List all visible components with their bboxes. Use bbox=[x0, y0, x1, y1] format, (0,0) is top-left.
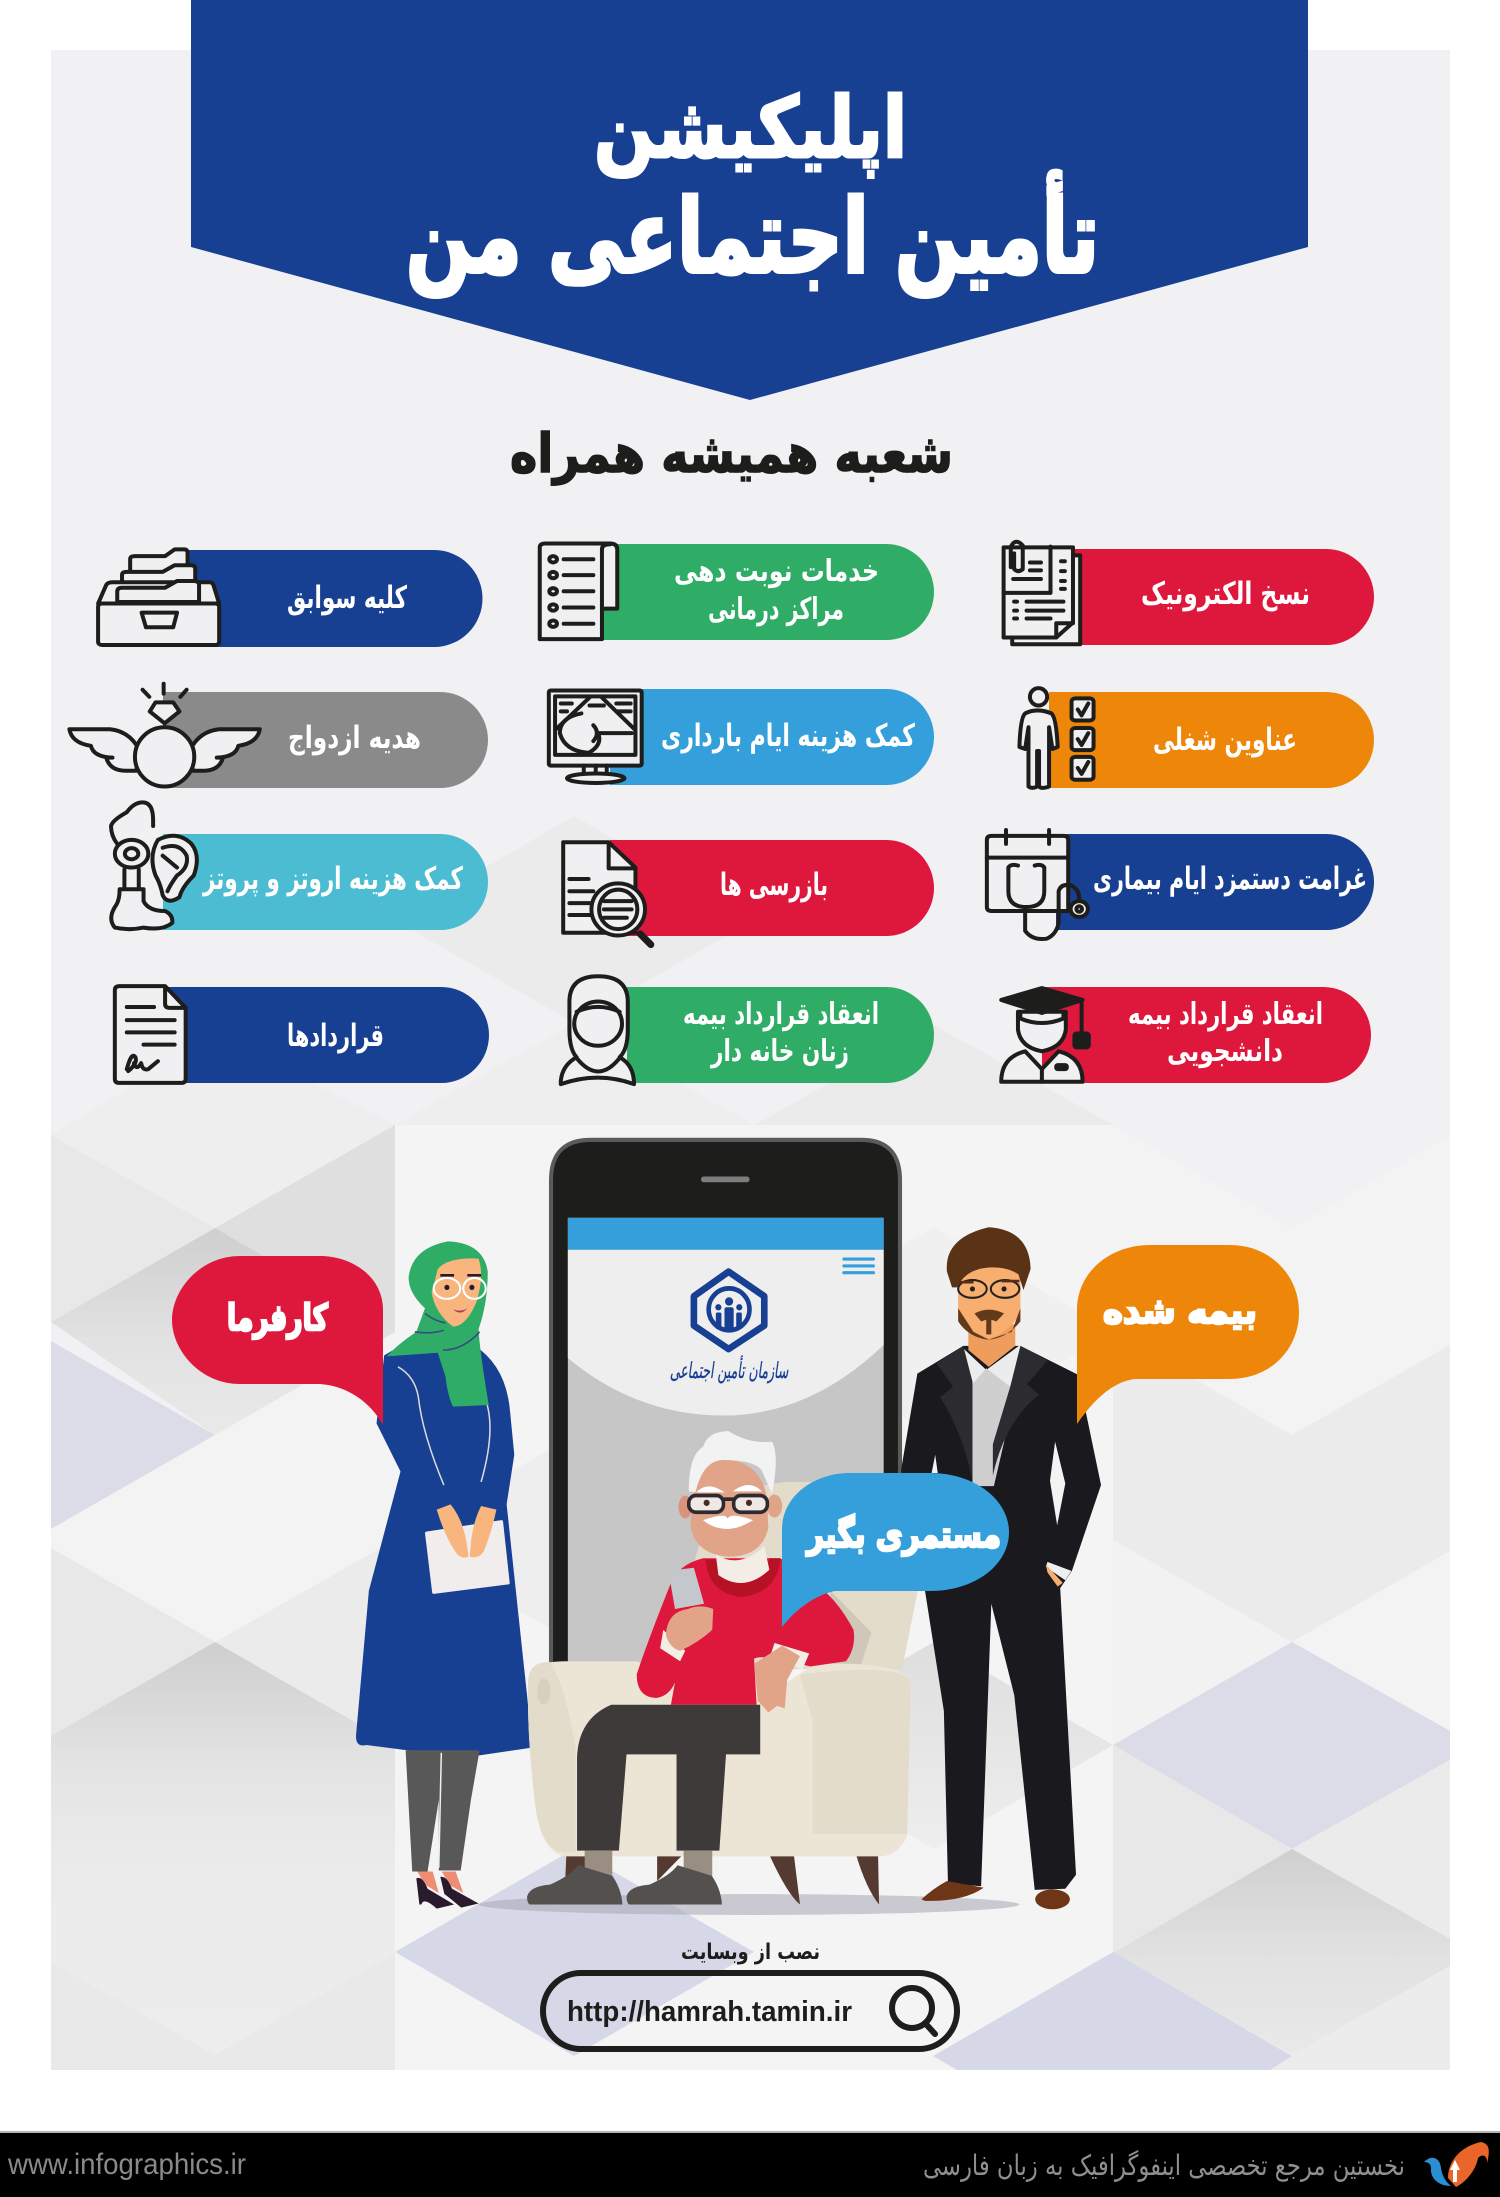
icon: calendar and stethoscope bbox=[987, 830, 1088, 939]
title line 1: اپلیکیشن bbox=[594, 79, 907, 178]
icon: paper scroll list bbox=[540, 543, 617, 639]
search box: http://hamrah.tamin.ir bbox=[567, 1996, 852, 2028]
illustration: phone and characters bbox=[356, 1140, 1101, 1915]
pill: inspections bbox=[610, 840, 934, 936]
callout: insured bbox=[1077, 1245, 1299, 1424]
icon: ultrasound monitor bbox=[549, 690, 642, 783]
title line 2: تأمین اجتماعی من bbox=[406, 170, 1099, 297]
pill: sick-leave compensation: غرامت دستمزد ایام بیماری bbox=[1093, 861, 1367, 897]
pill: job titles: عناوین شغلی bbox=[1153, 722, 1297, 758]
pill: electronic prescription bbox=[1075, 549, 1374, 645]
icon: signed contract bbox=[115, 986, 186, 1083]
callout: employer: کارفرما bbox=[227, 1298, 328, 1339]
search box bbox=[543, 1973, 957, 2049]
icon: winged ring bbox=[69, 684, 260, 787]
callout: pensioner bbox=[782, 1473, 1009, 1627]
icon: file drawer bbox=[98, 549, 219, 645]
callout: employer bbox=[172, 1256, 383, 1425]
character: old man bbox=[527, 1431, 854, 1904]
icon: document with magnifier bbox=[563, 842, 651, 945]
footer bar: www.infographics.ir bbox=[7, 2148, 246, 2181]
callout: pensioner: مستمری بگیر bbox=[805, 1514, 1001, 1556]
character: woman in hijab bbox=[356, 1241, 532, 1909]
pill: orthotics and prosthetics allowance bbox=[163, 834, 488, 930]
character: man in suit bbox=[901, 1227, 1101, 1909]
pill: housewives insurance: زنان خانه دار bbox=[710, 1034, 849, 1069]
pill: appointment services: خدمات نوبت دهی bbox=[674, 554, 879, 589]
pill: inspections: بازرسی ها bbox=[720, 867, 828, 903]
icon: site logo bbox=[1424, 2142, 1489, 2187]
chair bbox=[528, 1482, 920, 1904]
install label: نصب از وبسایت bbox=[681, 1940, 820, 1965]
title banner bbox=[191, 0, 1308, 400]
pill: student insurance bbox=[1042, 987, 1371, 1083]
callout: insured: بیمه شده bbox=[1103, 1291, 1257, 1332]
pill: electronic prescription: نسخ الکترونیک bbox=[1141, 576, 1310, 612]
icon: person with checklist bbox=[1019, 688, 1094, 788]
pill: pregnancy allowance: کمک هزینه ایام بارداری bbox=[661, 718, 916, 754]
pill: housewives insurance bbox=[627, 987, 934, 1083]
pill: job titles bbox=[1049, 692, 1374, 788]
pill: sick-leave compensation bbox=[1056, 834, 1374, 930]
pill: all records bbox=[186, 550, 482, 647]
pill: all records: کلیه سوابق bbox=[287, 580, 408, 616]
phone bbox=[551, 1140, 900, 1664]
pill: contracts bbox=[167, 987, 489, 1083]
pill: appointment services: مراکز درمانی bbox=[708, 592, 844, 627]
pill: student insurance: انعقاد قرارداد بیمه bbox=[1128, 997, 1323, 1032]
icon: prescription papers bbox=[1004, 542, 1080, 644]
floor shadow bbox=[479, 1894, 1019, 1915]
icon: magnifier bbox=[892, 1988, 935, 2034]
subtitle: شعبه همیشه همراه bbox=[510, 422, 953, 485]
pill: marriage gift: هدیه ازدواج bbox=[288, 720, 421, 756]
logo: social security organization: سازمان تأمین اجتماعی bbox=[670, 1355, 789, 1384]
icon: woman in niqab bbox=[561, 976, 634, 1084]
icon: prosthetic leg and ear bbox=[111, 802, 197, 929]
pill: appointment services bbox=[603, 544, 934, 640]
footer bar: نخستین مرجع تخصصی اینفوگرافیک به زبان فارسی bbox=[923, 2149, 1405, 2182]
pill: contracts: قراردادها bbox=[287, 1018, 384, 1054]
pill: housewives insurance: انعقاد قرارداد بیمه bbox=[683, 997, 879, 1032]
logo: social security organization bbox=[670, 1272, 789, 1384]
footer bar bbox=[0, 2131, 1500, 2197]
pill: pregnancy allowance bbox=[610, 689, 934, 785]
pill: orthotics and prosthetics allowance: کمک هزینه اروتز و پروتز bbox=[202, 861, 464, 897]
icon: graduate bbox=[1001, 988, 1089, 1082]
pill: student insurance: دانشجویی bbox=[1167, 1034, 1283, 1069]
pill: marriage gift bbox=[163, 692, 488, 788]
